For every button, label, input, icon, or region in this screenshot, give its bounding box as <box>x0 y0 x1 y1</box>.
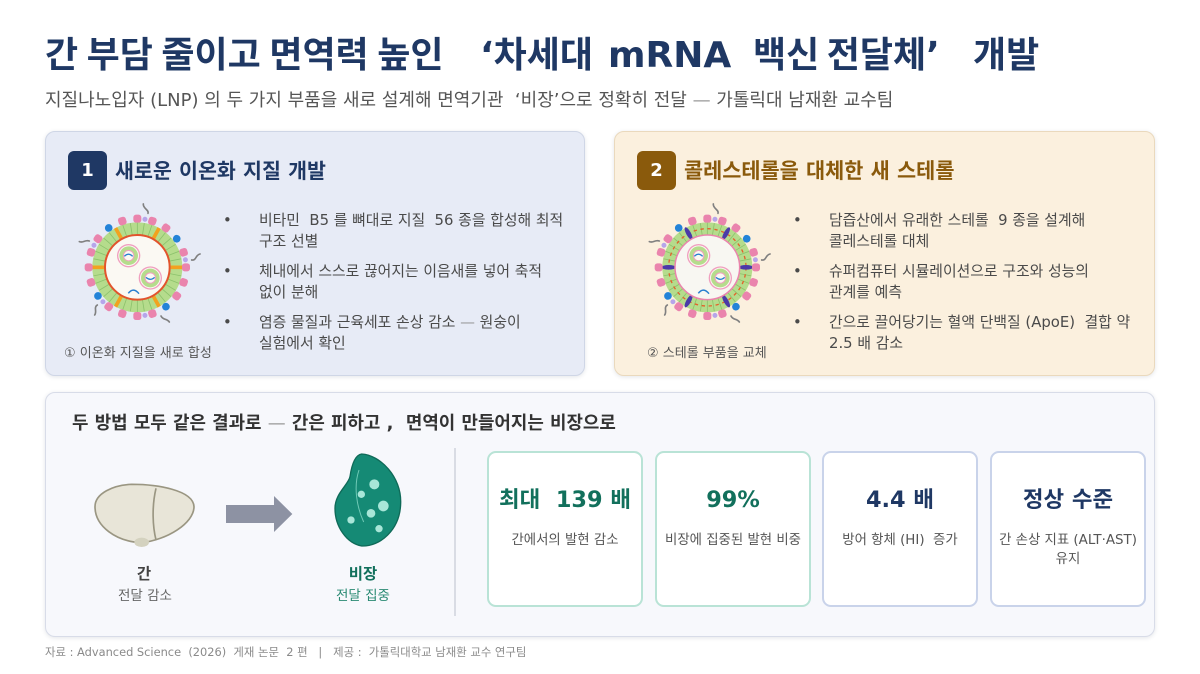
liver sublabel: 전달 감소 <box>118 588 172 604</box>
source footer: 자료 : Advanced Science (2026) 게재 논문 2 편 | 제공 : 가톨릭대학교 남재환 교수 연구팀 <box>45 645 526 659</box>
subtitle: 지질나노입자 (LNP) 의 두 가지 부품을 새로 설계해 면역기관 ‘비장’으로 정확히 전달 — 가톨릭대 남재환 교수팀 <box>45 90 893 111</box>
text: • <box>223 262 232 280</box>
stat card: antibody <box>822 451 978 607</box>
panel: results <box>45 392 1155 637</box>
stat value: 정상 수준 <box>1023 487 1113 513</box>
liver to spleen diagram <box>94 453 402 547</box>
panel: new sterol <box>614 131 1155 376</box>
arrow <box>226 496 292 532</box>
stat label: 방어 항체 (HI) 증가 <box>842 533 958 548</box>
icon: lipid nanoparticle 2 <box>648 203 771 323</box>
bullet 1: 담즙산에서 유래한 스테롤 9 종을 설계해 콜레스테롤 대체 <box>829 211 1085 250</box>
bullet 3: 염증 물질과 근육세포 손상 감소 — 원숭이 실험에서 확인 <box>259 313 521 352</box>
panel 2 heading: 콜레스테롤을 대체한 새 스테롤 <box>684 159 954 183</box>
title: 개발 <box>973 35 1039 76</box>
stat label: 비장에 집중된 발현 비중 <box>665 533 801 548</box>
panel 1 caption: ① 이온화 지질을 새로 합성 <box>64 346 212 361</box>
title: ‘차세대 <box>480 35 593 76</box>
bullet 2: 체내에서 스스로 끊어지는 이음새를 넣어 축적 없이 분해 <box>259 262 542 301</box>
results heading: 두 방법 모두 같은 결과로 — 간은 피하고 , 면역이 만들어지는 비장으로 <box>72 413 616 434</box>
text: • <box>793 262 802 280</box>
icon: lipid nanoparticle 1 <box>78 203 201 323</box>
title <box>45 35 1039 76</box>
panel 2 caption: ② 스테롤 부품을 교체 <box>647 346 767 361</box>
panel 1 heading: 새로운 이온화 지질 개발 <box>115 159 326 183</box>
badge 1 <box>68 151 107 190</box>
stat card: spleen share <box>655 451 811 607</box>
panel 1 bullet list <box>223 211 563 352</box>
panel 2 bullet list <box>793 211 1130 352</box>
icon: liver <box>95 484 194 547</box>
text: • <box>793 211 802 229</box>
text: • <box>793 313 802 331</box>
stat label: 간 손상 지표 (ALT·AST) 유지 <box>999 533 1137 567</box>
bullet 1: 비타민 B5 를 뼈대로 지질 56 종을 합성해 최적 구조 선별 <box>259 211 563 250</box>
stat value: 최대 139 배 <box>499 487 631 513</box>
stat value: 99% <box>706 487 760 513</box>
text: • <box>223 211 232 229</box>
badge 2 <box>637 151 676 190</box>
stat card: liver expression <box>487 451 643 607</box>
spleen sublabel: 전달 집중 <box>336 588 390 604</box>
icon: spleen <box>335 454 401 546</box>
badge 1: 1 <box>81 160 94 181</box>
panel: new ionizable lipid <box>45 131 585 376</box>
liver label: 간 <box>137 565 151 583</box>
title: 백신 전달체’ <box>753 35 940 76</box>
bullet 2: 슈퍼컴퓨터 시뮬레이션으로 구조와 성능의 관계를 예측 <box>829 262 1089 301</box>
title: mRNA <box>608 35 731 76</box>
bullet 3: 간으로 끌어당기는 혈액 단백질 (ApoE) 결합 약 2.5 배 감소 <box>829 313 1130 352</box>
spleen label: 비장 <box>349 565 377 583</box>
stat card: liver markers <box>990 451 1146 607</box>
badge 2: 2 <box>650 160 663 181</box>
stat value: 4.4 배 <box>866 487 934 513</box>
title: 간 부담 줄이고 면역력 높인 <box>45 35 443 76</box>
text: • <box>223 313 232 331</box>
stat label: 간에서의 발현 감소 <box>511 533 619 548</box>
